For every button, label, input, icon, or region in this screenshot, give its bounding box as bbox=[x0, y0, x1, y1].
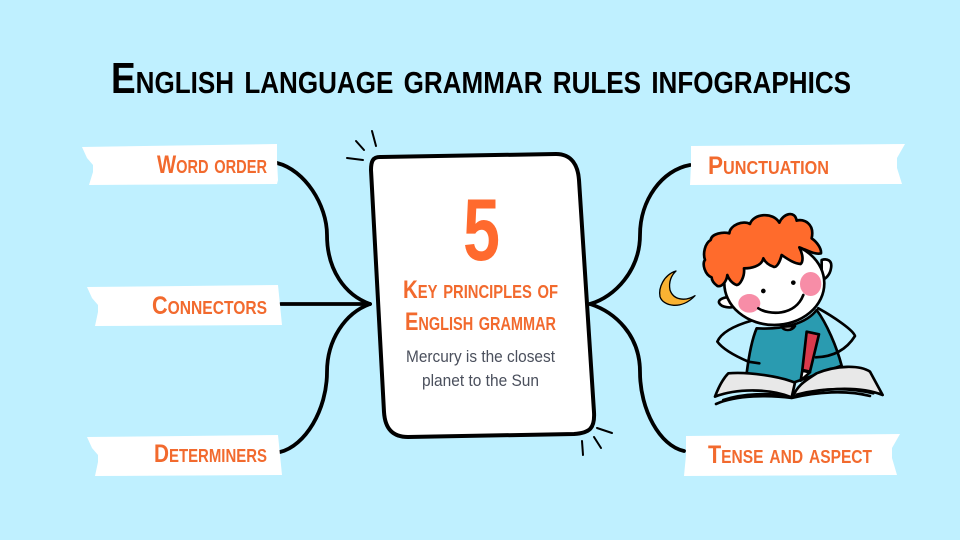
hair bbox=[704, 214, 821, 286]
collar bbox=[782, 326, 795, 330]
banner: Connectors bbox=[87, 285, 282, 326]
banner: Word order bbox=[82, 144, 278, 185]
card heading bbox=[403, 276, 558, 336]
body bbox=[747, 310, 842, 383]
banner: Determiners: Determiners bbox=[154, 440, 267, 468]
icon: crescent moon bbox=[660, 271, 695, 305]
banner: Punctuation bbox=[690, 144, 905, 185]
card description bbox=[406, 347, 555, 390]
banner: Punctuation: Punctuation bbox=[708, 152, 829, 180]
smile bbox=[758, 295, 803, 313]
open book bbox=[715, 367, 883, 404]
banner: Connectors: Connectors bbox=[152, 292, 267, 320]
card description: planet to the Sun bbox=[422, 371, 539, 390]
central card bbox=[371, 154, 594, 437]
big number 5: 5 bbox=[463, 180, 500, 279]
banner: Determiners bbox=[87, 435, 282, 476]
ears bbox=[719, 259, 831, 307]
cheeks bbox=[738, 272, 821, 313]
card description: Mercury is the closest bbox=[406, 347, 555, 366]
card shape bbox=[371, 154, 594, 437]
illustration: boy reading bbox=[704, 214, 883, 404]
card heading: Key principles of bbox=[403, 276, 558, 304]
connector lines bbox=[277, 163, 690, 452]
face bbox=[724, 242, 824, 325]
banner: Tense and aspect bbox=[684, 434, 900, 476]
banner: Tense and aspect: Tense and aspect bbox=[708, 441, 872, 469]
pencil bbox=[802, 332, 819, 372]
banner: Word order: Word order bbox=[157, 151, 267, 179]
spark marks bottom right bbox=[582, 428, 612, 455]
card heading: English grammar bbox=[405, 308, 556, 336]
spark marks top left bbox=[347, 131, 376, 160]
eyes bbox=[761, 280, 796, 293]
arms bbox=[717, 308, 855, 363]
